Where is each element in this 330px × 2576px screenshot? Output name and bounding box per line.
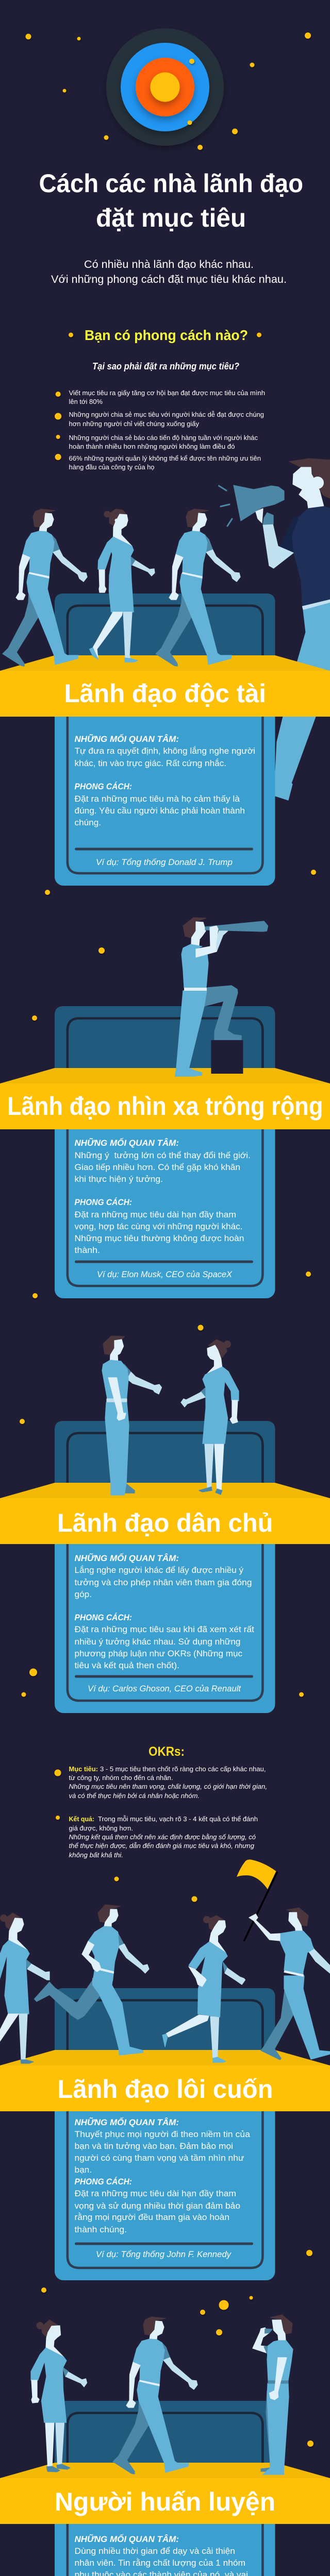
text block: charismatic: rằng mọi người đều tham gia vào hoàn (74, 2212, 229, 2222)
text block: democratic: tiêu và kết quả then chốt). (74, 1660, 179, 1670)
panel: coach stage (0, 2401, 330, 2576)
bullet list: goal facts: hoàn thành nhiều hơn những người không làm điều đó (69, 443, 235, 450)
banner title: coach: Người huấn luyện (55, 2487, 275, 2516)
text block: visionary: Những mục tiêu thường không được hoàn (74, 1233, 244, 1243)
figure: leader with flag (237, 1859, 330, 2060)
bullet list: goal facts: hơn những người chỉ viết chúng xuống giấy (69, 420, 199, 428)
text block: OKR definitions: Kết quả: (69, 1815, 94, 1823)
decorative dots: top (26, 32, 311, 150)
text block: charismatic: NHỮNG MỐI QUAN TÂM: (74, 2117, 179, 2127)
decorative dots: section 5 (34, 2250, 320, 2576)
text block: autocratic: PHONG CÁCH: (74, 782, 132, 791)
bullet list: goal facts: Những người chia sẻ báo cáo tiến độ hàng tuần với người khác (69, 434, 258, 442)
figure: man extending hand (102, 1336, 162, 1495)
text block: democratic: Lắng nghe người khác để lấy được nhiều ý (74, 1565, 244, 1575)
title (39, 169, 303, 232)
figure: running man (34, 1905, 149, 2055)
text block: democratic: góp. (74, 1589, 92, 1599)
text block: OKR definitions: và có thể thực hiện bởi cá nhân hoặc nhóm. (69, 1792, 200, 1800)
text block: autocratic: khác, tin vào trực giác. Rất cứng nhắc. (74, 758, 226, 768)
text block: charismatic: Thuyết phục mọi người đi theo niềm tin của (74, 2129, 251, 2139)
bullet list: goal facts: Những người chia sẻ mục tiêu với người khác dễ đạt được chúng (69, 411, 264, 418)
bullet list: goal facts: hàng đầu của công ty của họ (69, 463, 155, 471)
panel: charismatic stage (0, 1988, 330, 2280)
banner title: autocratic: Lãnh đạo độc tài (64, 679, 266, 708)
text block: visionary: NHỮNG MỐI QUAN TÂM: (74, 1138, 179, 1148)
figure: man with telescope (175, 918, 268, 1076)
text block: visionary: vọng, hợp tác cùng với những người khác. (74, 1222, 242, 1231)
text block: democratic: tưởng và cho phép nhân viên tham gia đóng (74, 1578, 252, 1587)
intro text: Có nhiều nhà lãnh đạo khác nhau. (84, 259, 254, 270)
text block: OKR definitions: 3 - 5 mục tiêu then chốt rõ ràng cho các cấp khác nhau, (100, 1765, 266, 1773)
icon: target (106, 28, 224, 146)
figure: woman running (162, 1916, 245, 2062)
bullet list: goal facts: lên tới 80% (69, 398, 103, 405)
text block: OKR definitions: thể thực hiện được, dẫn đến đánh giá mục tiêu và khó, nhưng (69, 1842, 255, 1850)
text block: charismatic: người có cùng tham vọng và tầm nhìn như (74, 2153, 244, 2163)
text block: coach: NHỮNG MỐI QUAN TÂM: (74, 2534, 179, 2544)
heading: your style: Bạn có phong cách nào? (85, 327, 248, 343)
banner title: charismatic: Lãnh đạo lôi cuốn (58, 2075, 273, 2104)
text block: autocratic: Tự đưa ra quyết định, không lắng nghe người (74, 746, 255, 756)
text block: charismatic: vọng và sử dụng nhiều thời gian đảm bảo (74, 2201, 240, 2211)
text block: visionary: thành. (74, 1245, 100, 1255)
text block: democratic: NHỮNG MỐI QUAN TÂM: (74, 1553, 179, 1563)
text block: visionary: Giao tiếp nhiều hơn. Có thể gặp khó khăn (74, 1162, 240, 1172)
text block: visionary: Đặt ra những mục tiêu dài hạn đầy tham (74, 1210, 236, 1219)
figure: leader with megaphone (219, 459, 330, 800)
decorative dots: section 4 (114, 1876, 197, 1902)
title: đặt mục tiêu (96, 204, 246, 232)
text block: democratic: Đặt ra những mục tiêu sau khi đã xem xét rất (74, 1624, 254, 1634)
text block: autocratic: đúng. Yêu cầu người khác phải hoàn thành (74, 806, 245, 816)
panel: democratic stage (0, 1421, 330, 1713)
text block: autocratic: chúng. (74, 818, 101, 827)
text block: democratic: phương pháp luận như OKRs (Những mục (74, 1649, 242, 1658)
figure: walking man (3, 509, 87, 666)
text block: OKR definitions: giá được, không hơn. (69, 1824, 133, 1832)
text block: autocratic: Ví dụ: Tổng thống Donald J. Trump (96, 857, 233, 867)
text block: visionary: Những ý tưởng lớn có thể thay đổi thế giới. (74, 1150, 251, 1160)
text block: autocratic: NHỮNG MỐI QUAN TÂM: (74, 734, 179, 744)
text block: visionary: PHONG CÁCH: (74, 1197, 132, 1207)
figure: standing woman (31, 2320, 87, 2472)
figure: man with whistle (253, 2315, 293, 2475)
text block: OKR definitions: Những kết quả then chốt nên xác định được bằng số lượng, có (69, 1833, 256, 1841)
text block: democratic (74, 1553, 254, 1693)
figure: walking woman (90, 509, 155, 662)
text block: democratic: nhiều ý tưởng khác nhau. Sử dụng những (74, 1637, 240, 1647)
panel: autocratic stage (0, 594, 330, 886)
figure: woman extending hand (181, 1340, 239, 1495)
text block: charismatic: bạn. (74, 2165, 92, 2175)
text block: visionary: Ví dụ: Elon Musk, CEO của SpaceX (97, 1269, 233, 1279)
text block: visionary: khi thực hiện ý tưởng. (74, 1174, 163, 1184)
text block: democratic: PHONG CÁCH: (74, 1613, 132, 1622)
bullet list: goal facts (55, 389, 265, 471)
figure: walking man 2 (156, 509, 240, 666)
text block: charismatic: thành chúng. (74, 2225, 127, 2234)
text block: OKR definitions: Trong mỗi mục tiêu, vạch rõ 3 - 4 kết quả có thể đánh (98, 1815, 258, 1823)
figure: woman walking left (0, 1913, 50, 2063)
text block: charismatic (74, 2117, 251, 2259)
text block: visionary (74, 1138, 251, 1279)
text block: charismatic: Đặt ra những mục tiêu dài hạn đầy tham (74, 2189, 236, 2198)
text block: democratic: Ví dụ: Carlos Ghoson, CEO của Renault (88, 1684, 241, 1693)
text block: OKR definitions: không bất khả thi. (69, 1851, 123, 1859)
decorative dots: section 3 (20, 1272, 311, 1697)
text block: charismatic: bạn và tin tưởng vào bạn. Đảm bảo mọi (74, 2141, 233, 2151)
heading: OKRs: OKRs: (148, 1744, 185, 1759)
text block: coach: Dùng nhiều thời gian để dạy và cải thiện (74, 2546, 235, 2556)
intro text (51, 259, 287, 285)
title: Cách các nhà lãnh đạo (39, 169, 303, 198)
text block: OKR definitions: Những mục tiêu nên tham vọng, chất lượng, có giới hạn thời gian, (69, 1783, 267, 1790)
decorative dots: section 2 (32, 870, 316, 1021)
text block: autocratic (74, 734, 255, 867)
text block: coach: nhân viên. Tin rằng chất lượng của 1 nhóm (74, 2558, 245, 2568)
bullet list: goal facts: 66% những người quản lý không thể kể được tên những ưu tiên (69, 454, 261, 462)
figure: walking man center (113, 2317, 197, 2474)
text block: autocratic: Đặt ra những mục tiêu mà họ cảm thấy là (74, 794, 240, 804)
panel: visionary stage (0, 1006, 330, 1298)
text block: OKR definitions (55, 1765, 267, 1859)
text block: coach (74, 2534, 252, 2576)
bullet list: goal facts: Viết mục tiêu ra giấy tăng cơ hội bạn đạt được mục tiêu của mình (69, 389, 265, 397)
text block: charismatic: Ví dụ: Tổng thống John F. Kennedy (96, 2249, 232, 2259)
text block: OKR definitions: từ công ty, nhóm cho đến cá nhân. (69, 1774, 173, 1782)
text block: charismatic: PHONG CÁCH: (74, 2177, 132, 2187)
subheading: why set goals: Tại sao phải đặt ra những mục tiêu? (92, 361, 239, 371)
intro text: Với những phong cách đặt mục tiêu khác nhau. (51, 274, 287, 285)
text block: OKR definitions: Mục tiêu: (69, 1765, 98, 1773)
banner title: democratic: Lãnh đạo dân chủ (57, 1509, 273, 1537)
